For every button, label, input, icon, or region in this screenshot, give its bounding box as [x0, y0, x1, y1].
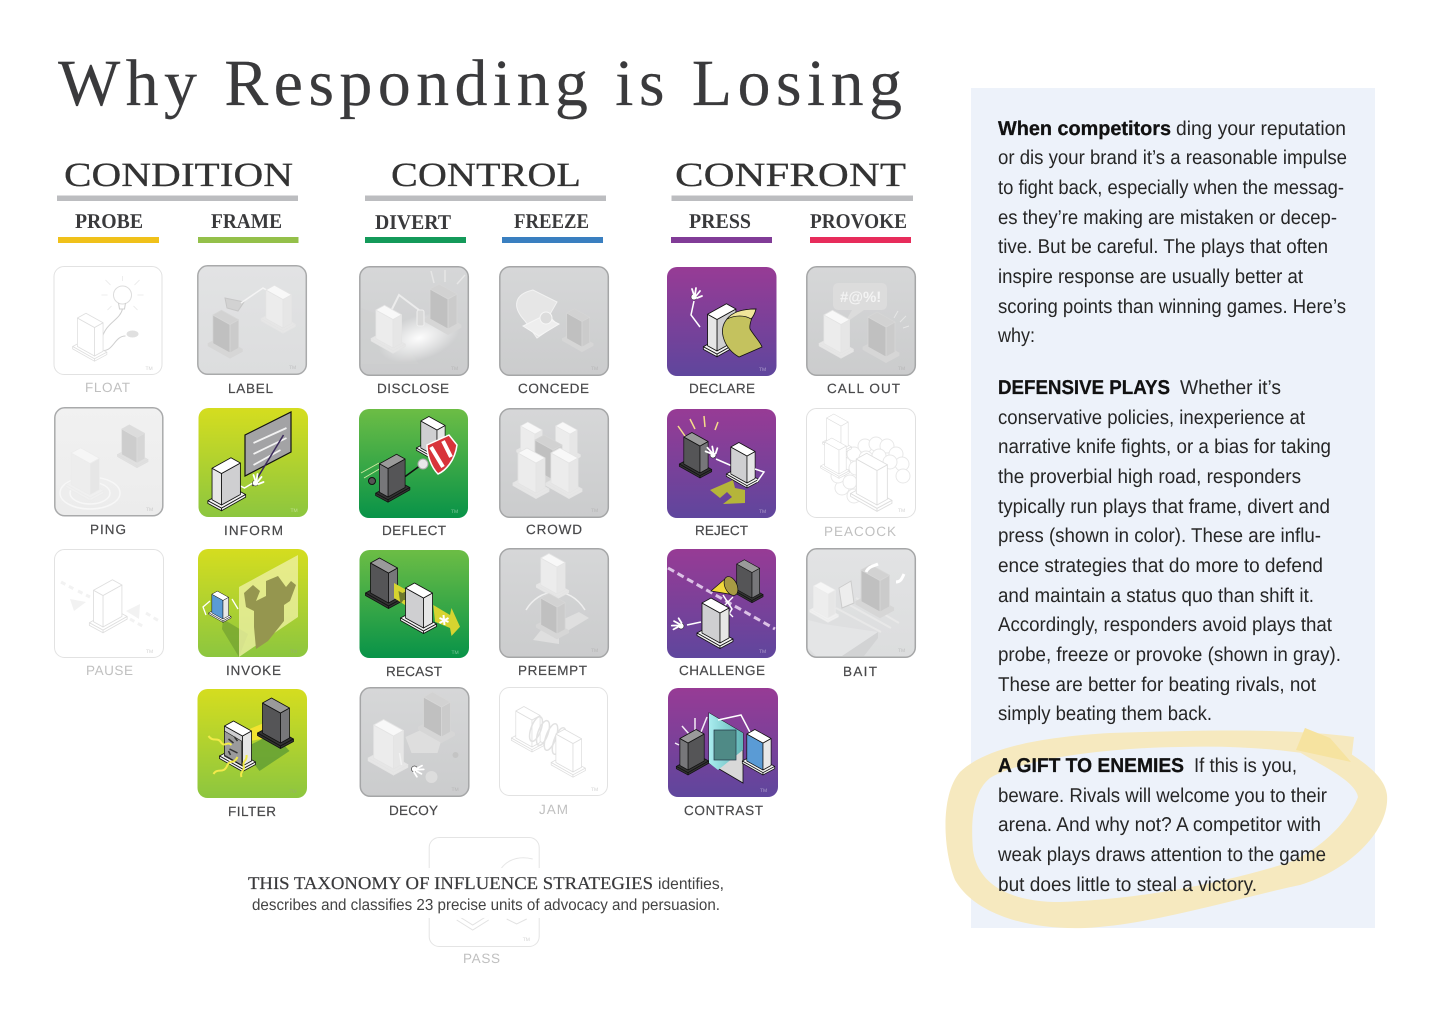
- text block: defensive plays: Whether it’s: [1180, 377, 1281, 399]
- text block: defensive plays: Accordingly, responders avoid plays that: [998, 614, 1332, 636]
- text block: defensive plays: ence strategies that do more to defend: [998, 555, 1323, 577]
- column head: PRESS: PRESS: [689, 209, 751, 233]
- text block: a gift to enemies: but does little to steal a victory.: [998, 874, 1257, 896]
- strategy: DECOY: DECOY: [389, 803, 438, 818]
- strategy: PING: TM: [146, 507, 153, 513]
- strategy: FILTER: FILTER: [228, 804, 276, 819]
- strategy: FLOAT: FLOAT: [85, 380, 130, 395]
- strategy: CONCEDE: [500, 267, 608, 396]
- strategy: RECAST: RECAST: [386, 664, 442, 679]
- text block: when competitors: inspire response are usually better at: [998, 266, 1303, 288]
- text block: when competitors: or dis your brand it’s a reasonable impulse: [998, 147, 1347, 169]
- text block: defensive plays: narrative knife fights, or a bias for taking: [998, 436, 1331, 458]
- caption: taxonomy note: THIS TAXONOMY OF INFLUENCE STRATEGIES: [248, 873, 653, 893]
- strategy: DECLARE: TM: [759, 367, 766, 373]
- strategy: RECAST: [360, 550, 469, 679]
- strategy: CROWD: [500, 409, 608, 537]
- column head: FRAME: [198, 209, 298, 243]
- strategy: FILTER: TM: [290, 789, 297, 795]
- strategy: CHALLENGE: TM: [759, 649, 766, 655]
- strategy: CONCEDE: CONCEDE: [518, 381, 589, 396]
- strategy: CALL OUT: #@%!: [840, 289, 881, 306]
- text block: defensive plays: typically run plays that frame, divert and: [998, 496, 1330, 518]
- strategy: CALL OUT: TM: [898, 366, 905, 372]
- text block: defensive plays: These are better for beating rivals, not: [998, 674, 1316, 696]
- category: CONTROL: [365, 157, 606, 201]
- strategy: CONTRAST: [668, 688, 778, 818]
- column head: DIVERT: DIVERT: [375, 210, 451, 234]
- strategy: PREEMPT: TM: [591, 648, 598, 654]
- strategy: FILTER: [198, 689, 307, 819]
- strategy: FLOAT: TM: [146, 366, 153, 372]
- column head: FREEZE: [502, 209, 603, 243]
- category: CONDITION: [57, 157, 298, 201]
- strategy: INVOKE: [198, 549, 308, 678]
- strategy: DEFLECT: DEFLECT: [382, 523, 446, 538]
- column head: PRESS: [671, 209, 772, 243]
- strategy: DECLARE: DECLARE: [689, 381, 755, 396]
- strategy: PEACOCK: TM: [898, 508, 905, 514]
- strategy: INVOKE: TM: [290, 649, 297, 655]
- title: Why Responding is Losing: [58, 47, 902, 120]
- strategy: REJECT: TM: [759, 509, 766, 515]
- strategy: CONTRAST: CONTRAST: [684, 803, 763, 818]
- category: CONDITION: CONDITION: [64, 157, 293, 194]
- column head: PROVOKE: [810, 209, 911, 243]
- text block: when competitors: ding your reputation: [1176, 118, 1346, 140]
- panel: sidebar: [945, 88, 1387, 928]
- strategy: PREEMPT: [500, 549, 608, 678]
- column head: PROVOKE: PROVOKE: [810, 209, 907, 233]
- strategy: CROWD: CROWD: [526, 522, 582, 537]
- strategy: FLOAT: [54, 266, 162, 395]
- column head: PROBE: [58, 209, 159, 243]
- category: CONTROL: CONTROL: [391, 157, 581, 194]
- text block: a gift to enemies: arena. And why not? A competitor with: [998, 814, 1321, 836]
- strategy: CHALLENGE: [667, 549, 776, 678]
- strategy: BAIT: [807, 549, 915, 679]
- strategy: JAM: TM: [591, 787, 598, 793]
- text block: defensive plays: probe, freeze or provoke (shown in gray).: [998, 644, 1341, 666]
- strategy: DISCLOSE: [360, 267, 468, 396]
- strategy: CHALLENGE: CHALLENGE: [679, 663, 765, 678]
- text block: a gift to enemies: beware. Rivals will welcome you to their: [998, 785, 1327, 807]
- strategy: LABEL: LABEL: [228, 381, 273, 396]
- strategy: PASS: TM: [523, 937, 530, 943]
- text block: defensive plays: simply beating them back.: [998, 703, 1212, 725]
- category: CONFRONT: [672, 157, 913, 201]
- strategy: CALL OUT: [807, 267, 915, 396]
- strategy: DECOY: TM: [452, 787, 459, 793]
- category: CONFRONT: CONFRONT: [675, 157, 906, 194]
- strategy: CROWD: TM: [591, 508, 598, 514]
- text block: defensive plays: DEFENSIVE PLAYS: [998, 377, 1170, 399]
- caption: taxonomy note: identifies,: [658, 876, 724, 893]
- text block: when competitors: why:: [997, 325, 1035, 347]
- text block: when competitors: scoring points than winning games. Here’s: [998, 296, 1346, 318]
- text block: defensive plays: [998, 377, 1341, 725]
- strategy: JAM: JAM: [539, 802, 568, 817]
- text block: a gift to enemies: weak plays draws attention to the game: [997, 844, 1326, 866]
- text block: a gift to enemies: A GIFT TO ENEMIES: [998, 755, 1184, 777]
- strategy: INVOKE: INVOKE: [226, 663, 281, 678]
- column head: FREEZE: FREEZE: [514, 209, 589, 233]
- strategy: CALL OUT: CALL OUT: [827, 381, 900, 396]
- text block: a gift to enemies: If this is you,: [1194, 755, 1297, 777]
- text block: defensive plays: the proverbial high road, responders: [998, 466, 1301, 488]
- strategy: PAUSE: TM: [146, 649, 153, 655]
- column head: PROBE: PROBE: [75, 209, 143, 233]
- strategy: LABEL: [198, 266, 306, 396]
- strategy: PREEMPT: PREEMPT: [518, 663, 587, 678]
- text block: defensive plays: conservative policies, inexperience at: [998, 407, 1305, 429]
- strategy: INFORM: TM: [290, 508, 298, 514]
- strategy: DISCLOSE: TM: [451, 366, 458, 372]
- text block: defensive plays: and maintain a status quo than shift it.: [998, 585, 1314, 607]
- caption: taxonomy note: describes and classifies 23 precise units of advocacy and persuasion.: [252, 897, 720, 914]
- column head: FRAME: FRAME: [211, 209, 282, 233]
- strategy: REJECT: [667, 409, 776, 538]
- strategy: LABEL: TM: [289, 365, 296, 371]
- strategy: BAIT: TM: [898, 648, 905, 654]
- strategy: PEACOCK: PEACOCK: [824, 524, 896, 539]
- highlight: yellow marker loop: [945, 728, 1387, 928]
- strategy: DEFLECT: [359, 409, 468, 538]
- strategy: REJECT: REJECT: [695, 523, 748, 538]
- strategy: INFORM: INFORM: [224, 523, 283, 538]
- text block: when competitors: [997, 118, 1347, 347]
- strategy: BAIT: BAIT: [843, 664, 877, 679]
- text block: when competitors: When competitors: [998, 118, 1171, 140]
- strategy: CONCEDE: TM: [591, 366, 598, 372]
- text block: when competitors: to fight back, especially when the messag-: [998, 177, 1344, 199]
- strategy: PING: PING: [90, 522, 126, 537]
- strategy: PAUSE: PAUSE: [86, 663, 133, 678]
- strategy: INFORM: [198, 408, 308, 538]
- strategy: DECOY: [360, 688, 469, 818]
- text block: defensive plays: press (shown in color). These are influ-: [998, 525, 1321, 547]
- strategy: DEFLECT: TM: [451, 509, 458, 515]
- strategy: DECLARE: [667, 267, 776, 396]
- text block: a gift to enemies: [997, 755, 1327, 896]
- caption: taxonomy note: [244, 868, 728, 918]
- strategy: PING: [55, 408, 163, 537]
- strategy: CONTRAST: TM: [760, 788, 767, 794]
- strategy: PASS: PASS: [463, 951, 500, 966]
- text block: when competitors: tive. But be careful. The plays that often: [998, 236, 1328, 258]
- strategy: JAM: [500, 688, 608, 817]
- strategy: PAUSE: [54, 550, 164, 678]
- strategy: PEACOCK: [806, 408, 916, 539]
- strategy: RECAST: TM: [452, 650, 459, 656]
- column head: DIVERT: [365, 210, 466, 243]
- strategy: PASS: [429, 838, 539, 966]
- text block: when competitors: es they’re making are mistaken or decep-: [998, 207, 1337, 229]
- strategy: DISCLOSE: DISCLOSE: [377, 381, 449, 396]
